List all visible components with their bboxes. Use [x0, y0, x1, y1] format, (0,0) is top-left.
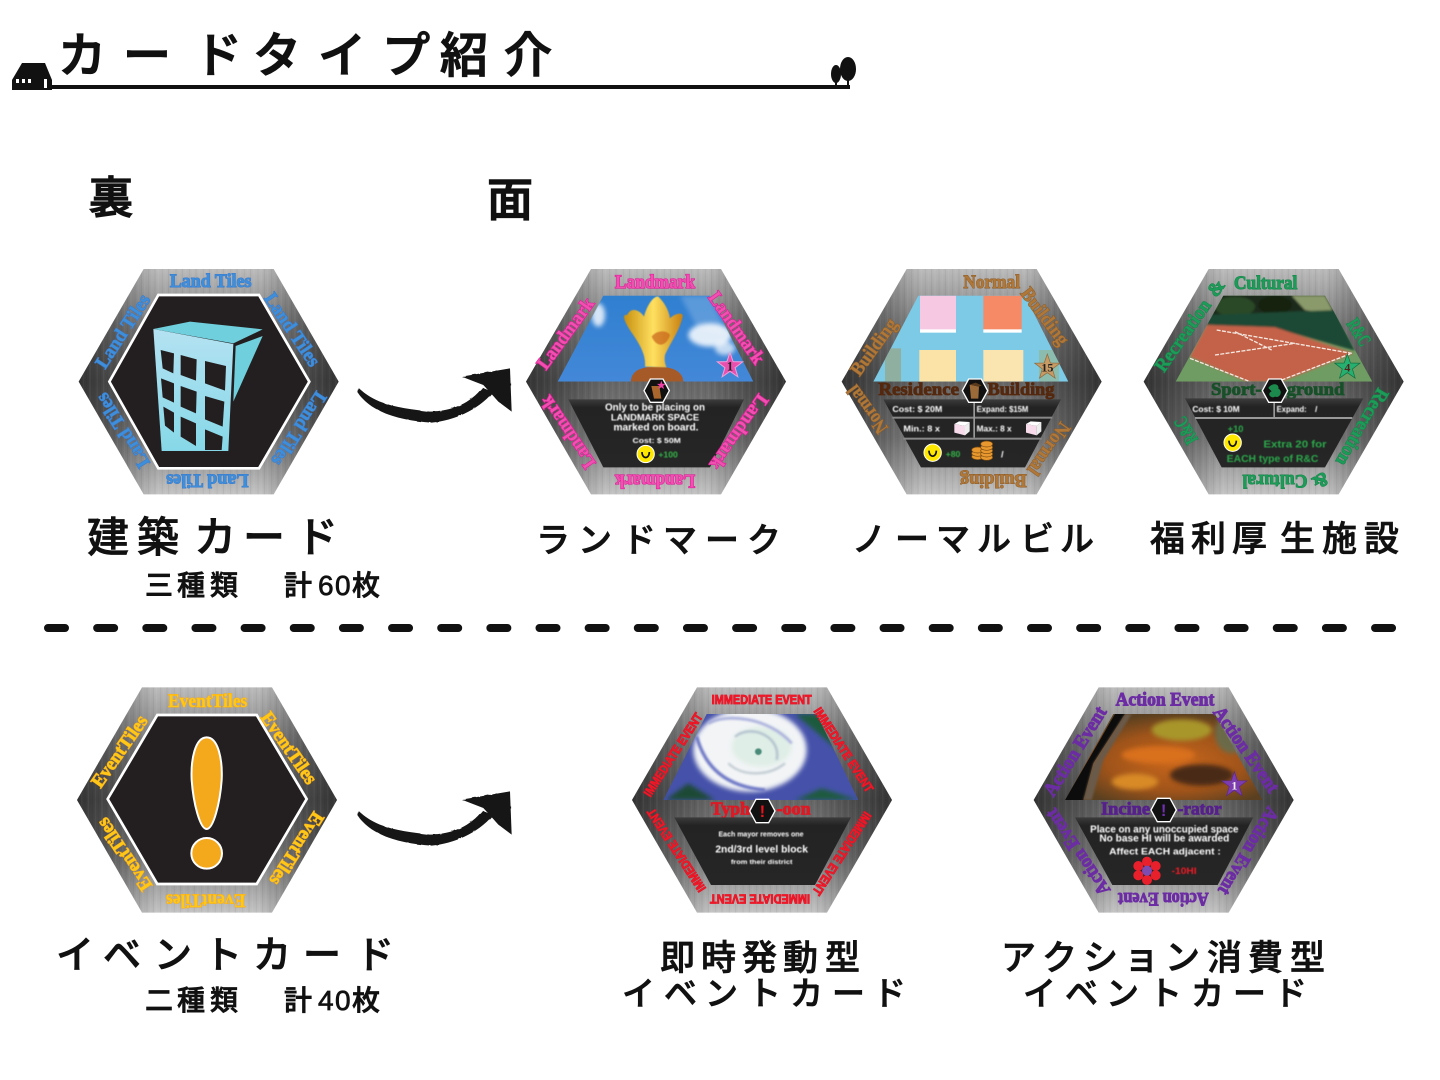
card: action event incinerator [1034, 687, 1294, 913]
event name: -oon [777, 798, 811, 818]
label: action consumption event cards: アクション消費型 [1001, 939, 1325, 978]
panel: building stats: / [1001, 449, 1004, 459]
event name: Typh [711, 798, 750, 818]
edge labels: Landmark [705, 390, 772, 474]
label: immediate event cards: イベントカード [622, 975, 906, 1012]
label: building card counts: 三種類計60枚 [145, 570, 380, 601]
edge labels: Land Tiles [259, 289, 324, 371]
picture: tennis court [1172, 293, 1378, 383]
edge labels: Action Event [1040, 703, 1112, 800]
icon: recreation badge [1262, 379, 1288, 402]
panel: landmark rules: +100 [658, 450, 678, 460]
edge labels: Normal [843, 380, 893, 437]
edge labels: R&C [1170, 412, 1203, 448]
edge labels: Landmark [615, 470, 695, 491]
panel: recreation stats [1185, 398, 1363, 467]
panel: incinerator rules [1075, 817, 1253, 885]
edge labels: EventTiles [264, 808, 327, 889]
panel: recreation stats: Extra 20 for [1263, 439, 1327, 450]
edge labels: IMMEDIATE EVENT [644, 805, 709, 894]
panel: building stats [883, 399, 1061, 467]
edge labels: Landmark [536, 391, 600, 472]
panel: building stats: Max.: 8 x [977, 423, 1012, 433]
card back: land tiles [79, 269, 339, 494]
building name [1211, 379, 1344, 399]
edge labels: Action Event [1116, 689, 1215, 710]
star badge: level 1 [1222, 772, 1247, 796]
edge labels: Cultural [1242, 470, 1307, 491]
star badge: level 15: 15 [1041, 360, 1053, 374]
label: building cards: 建築カード [87, 514, 338, 561]
picture: typhoon [664, 714, 858, 800]
event name [711, 798, 811, 818]
heading: front side: 面 [487, 174, 533, 226]
icon: building [153, 322, 263, 451]
building name: ground [1287, 379, 1344, 399]
event name [1101, 798, 1222, 818]
edge labels: & [1308, 467, 1332, 493]
event name: Incine [1101, 798, 1150, 818]
panel: incinerator rules: No base HI will be awarded [1099, 833, 1229, 844]
picture: trophy in sky [553, 293, 760, 383]
edge labels: Action Event [1041, 804, 1115, 899]
edge labels [92, 271, 330, 490]
label: immediate event cards: 即時発動型 [660, 939, 860, 978]
panel: landmark rules: LANDMARK SPACE [611, 413, 699, 423]
star badge: level 15 [1035, 354, 1060, 378]
edge labels: Building [1016, 284, 1073, 350]
panel: incinerator rules: Place on any unoccupied space [1090, 824, 1239, 835]
edge labels: Recreation [1151, 296, 1216, 376]
edge labels: EventTiles [256, 708, 321, 789]
edge labels: EventTiles [166, 889, 245, 910]
edge labels: IMMEDIATE EVENT [641, 710, 706, 799]
edge labels: Landmark [703, 288, 769, 369]
edge labels: EventTiles [87, 711, 153, 792]
section divider [48, 624, 1398, 632]
card: landmark [526, 269, 786, 494]
panel: incinerator rules: -10HI [1172, 866, 1197, 876]
panel: recreation stats: EACH type of R&C [1227, 454, 1318, 465]
edge labels: EventTiles [168, 691, 248, 712]
label: normal building: ノーマルビル [852, 521, 1094, 559]
panel: recreation stats: +10 [1228, 424, 1243, 434]
edge labels: IMMEDIATE EVENT [809, 809, 874, 898]
label: immediate event cards [622, 939, 906, 1012]
edge labels [533, 272, 772, 491]
edge labels: & [1203, 276, 1230, 301]
edge labels: Action Event [1118, 888, 1209, 909]
star badge: level 1 [717, 353, 743, 377]
edge labels: IMMEDIATE EVENT [710, 891, 810, 905]
edge labels: Cultural [1234, 273, 1298, 294]
panel: landmark rules: marked on board. [613, 423, 699, 434]
edge labels: Action Event [1213, 803, 1282, 899]
edge labels: Building [847, 314, 902, 380]
edge labels: Action Event [1208, 703, 1283, 797]
panel: building stats: Expand: $15M [977, 404, 1028, 414]
edge labels: Land Tiles [266, 387, 330, 470]
card: immediate event typhoon [632, 687, 892, 913]
edge labels [1040, 689, 1283, 909]
panel: building stats: Min.: 8 x [903, 423, 940, 433]
panel: landmark rules: Only to be placing on [605, 403, 705, 414]
edge labels: Recreation [1331, 384, 1392, 469]
panel: recreation stats: Cost: $ 10M [1192, 404, 1240, 414]
label: action consumption event cards [1001, 939, 1325, 1012]
edge labels: Land Tiles [92, 388, 154, 471]
panel: building stats: Cost: $ 20M [892, 404, 942, 414]
building name: Sport- [1211, 379, 1262, 399]
panel: landmark rules [568, 399, 744, 467]
icon: landmark badge [644, 379, 669, 402]
star badge: level 4 [1335, 354, 1360, 378]
panel: landmark rules: Cost: $ 50M [632, 436, 681, 445]
arrow: land tiles to fronts [357, 368, 512, 423]
icon: purple exclamation badge [1151, 798, 1176, 822]
arrow: event tiles to fronts [357, 791, 512, 846]
edge labels: IMMEDIATE EVENT [811, 705, 876, 795]
event name: -rator [1178, 798, 1222, 818]
star badge: level 4: 4 [1344, 361, 1350, 375]
icon: coin stacks [972, 441, 993, 460]
building name [878, 379, 1054, 399]
edge labels: Landmark [533, 294, 599, 374]
star badge: level 1: 1 [727, 360, 733, 374]
panel: typhoon rules: from their district [731, 859, 793, 866]
title underline with house and trees [12, 57, 856, 90]
label: landmark: ランドマーク [536, 522, 781, 560]
icon: adjacent hexes [1133, 857, 1161, 885]
panel: recreation stats: Expand: [1277, 404, 1307, 414]
picture: fire [1062, 713, 1268, 802]
edge labels [641, 693, 876, 905]
edge labels: Normal [963, 272, 1021, 293]
card: recreation and cultural [1144, 269, 1404, 494]
panel: typhoon rules [674, 817, 851, 885]
edge labels: IMMEDIATE EVENT [712, 693, 812, 707]
edge labels: Normal [1022, 418, 1074, 479]
edge labels: Landmark [615, 272, 695, 293]
label: welfare facilities: 福利厚生施設 [1150, 520, 1399, 559]
label: event card counts: 二種類計40枚 [145, 985, 380, 1016]
title: card types [12, 30, 856, 90]
edge labels: Land Tiles [170, 271, 252, 292]
icon: exclamation mark [191, 737, 222, 869]
edge labels [87, 691, 327, 910]
edge labels: EventTiles [93, 813, 157, 894]
picture: residence windows [868, 293, 1075, 383]
icon: red exclamation badge [750, 799, 775, 823]
panel: recreation stats: / [1315, 404, 1318, 414]
edge labels [843, 272, 1074, 490]
edge labels: R&C [1342, 315, 1375, 350]
edge labels: Building [960, 469, 1027, 490]
label: action consumption event cards: イベントカード [1023, 975, 1307, 1012]
edge labels: Land Tiles [166, 469, 248, 490]
edge labels [1151, 273, 1392, 493]
card back: event tiles [77, 687, 337, 913]
star badge: level 1: 1 [1231, 778, 1237, 792]
icon: building badge [962, 379, 988, 402]
icon: red exclamation badge: ! [760, 802, 765, 821]
card: normal building [842, 269, 1102, 494]
icon: purple exclamation badge: ! [1161, 801, 1166, 820]
heading: back side: 裏 [89, 174, 133, 223]
panel: building stats: +80 [946, 449, 961, 459]
edge labels: Land Tiles [92, 290, 155, 373]
label: event cards: イベントカード [56, 935, 394, 977]
building name: Residence [878, 379, 959, 399]
building name: Building [988, 379, 1054, 399]
panel: typhoon rules: Each mayor removes one [718, 830, 803, 839]
title: card types: カードタイプ紹介 [58, 30, 552, 83]
panel: typhoon rules: 2nd/3rd level block [715, 845, 809, 856]
panel: incinerator rules: Affect EACH adjacent : [1109, 847, 1221, 857]
